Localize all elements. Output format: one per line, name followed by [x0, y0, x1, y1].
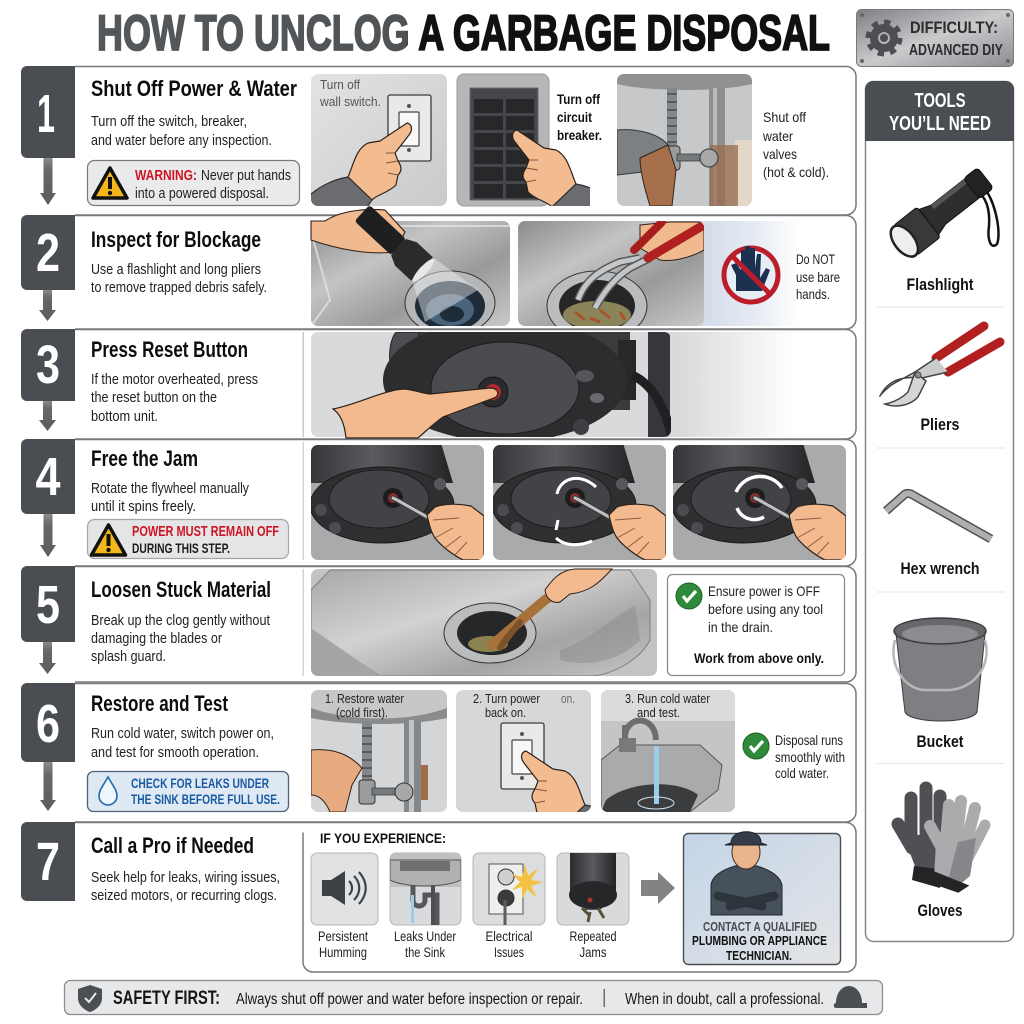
step 7 text — [91, 869, 280, 904]
step 1 heading: Shut Off Power & Water — [91, 76, 297, 101]
label: water valves: Shut off — [763, 109, 806, 125]
icon: no bare hands — [724, 246, 778, 302]
tool: hex wrench: Hex wrench — [900, 559, 980, 578]
step 5 number badge — [21, 566, 75, 642]
step 4 warning callout: POWER MUST REMAIN OFF — [132, 523, 279, 540]
label: do not use bare hands — [796, 251, 840, 302]
image: turn power back on: on. — [561, 691, 575, 706]
safety first bar — [64, 980, 882, 1014]
icon: water drop — [99, 777, 117, 805]
tool: gloves: Gloves — [918, 901, 962, 920]
step 2 text: to remove trapped debris safely. — [91, 279, 267, 296]
step 7 panel — [21, 822, 856, 972]
step 4 text: until it spins freely. — [91, 498, 196, 515]
step 3 text: If the motor overheated, press — [91, 371, 258, 388]
step 1 text — [91, 113, 272, 149]
step 6 number badge: 6 — [36, 694, 60, 754]
step 4 number badge: 4 — [36, 447, 60, 507]
step 7 text: Seek help for leaks, wiring issues, — [91, 869, 280, 886]
step 2 panel — [21, 206, 857, 330]
arrow 6 to 7 — [40, 762, 56, 811]
image: wrench in flywheel — [311, 445, 484, 560]
step 3 number badge — [21, 329, 75, 401]
callout: ensure power off: Ensure power is OFF — [708, 583, 820, 599]
tool: hex wrench — [886, 493, 991, 578]
tool: bucket — [893, 618, 987, 751]
image: spoon in sink drain — [311, 569, 657, 676]
step 1 number badge: 1 — [37, 84, 55, 144]
step 1 number badge — [21, 66, 75, 158]
step 3 text: bottom unit. — [91, 408, 158, 425]
image: rotate wrench with arrows — [493, 445, 666, 560]
step 6 text: Run cold water, switch power on, — [91, 725, 274, 742]
step 2 number badge — [21, 215, 75, 290]
safety first bar: When in doubt, call a professional. — [625, 991, 824, 1008]
tile: electrical issues — [473, 853, 545, 960]
image: turn power back on — [456, 690, 591, 812]
safety first bar: SAFETY FIRST: — [113, 988, 220, 1009]
tile: repeated jams: Jams — [580, 944, 606, 960]
tool: pliers — [880, 326, 1000, 434]
label: do not use bare hands: use bare — [796, 269, 840, 285]
step 3 number badge: 3 — [36, 335, 60, 395]
step 1 panel — [21, 66, 856, 224]
tile: leaks under the sink: Leaks Under — [394, 928, 456, 944]
tool: flashlight: Flashlight — [906, 275, 974, 294]
image: wall switch — [308, 74, 447, 217]
step 1 warning callout: into a powered disposal. — [135, 185, 269, 202]
step 1 warning callout — [88, 160, 300, 206]
image: wall switch: wall switch. — [319, 94, 381, 109]
heading: if you experience: IF YOU EXPERIENCE: — [320, 830, 446, 846]
icon: shield — [78, 985, 102, 1012]
step 4 panel — [21, 439, 856, 566]
icon: hard hat — [834, 986, 867, 1008]
step 6 number badge — [21, 683, 75, 762]
image: circuit breaker — [456, 74, 590, 206]
tile: persistent humming: Persistent — [318, 928, 368, 944]
step 4 warning callout: DURING THIS STEP. — [132, 540, 230, 556]
step 5 number badge: 5 — [36, 575, 60, 635]
arrow 5 to 6 — [39, 642, 56, 674]
tool: bucket: Bucket — [916, 732, 964, 751]
step 2 heading: Inspect for Blockage — [91, 227, 261, 252]
step 4 text — [91, 480, 249, 515]
step 2 text — [91, 261, 267, 296]
callout: check for leaks: THE SINK BEFORE FULL USE. — [131, 791, 280, 807]
image: water valves — [617, 74, 752, 206]
technician card — [684, 832, 840, 964]
callout: ensure power off: before using any tool — [708, 601, 823, 617]
step 3 panel — [21, 329, 857, 440]
callout: ensure power off — [668, 574, 844, 676]
tile: leaks under the sink: the Sink — [405, 944, 446, 960]
image: flashlight over drain — [311, 201, 510, 335]
tools panel — [865, 81, 1014, 942]
step 1 warning callout: Never put hands — [201, 167, 291, 184]
arrow to technician — [641, 872, 675, 904]
label: water valves: water — [762, 128, 793, 144]
step 6 panel — [21, 682, 857, 822]
tile: repeated jams: Repeated — [570, 928, 616, 944]
step 5 text: Break up the clog gently without — [91, 612, 271, 629]
tile: persistent humming: Humming — [319, 944, 367, 960]
image: restore water: 1. Restore water — [325, 691, 405, 706]
label: water valves — [762, 109, 829, 180]
tool: gloves — [898, 788, 985, 920]
image: reset button — [311, 332, 770, 439]
step 4 warning callout — [88, 520, 288, 558]
callout: ensure power off: Work from above only. — [694, 650, 824, 666]
image: run cold water: 3. Run cold water — [625, 691, 711, 706]
label: water valves: (hot & cold). — [763, 164, 829, 180]
note: runs smoothly: Disposal runs — [775, 732, 843, 748]
safety first bar: Always shut off power and water before inspection or repair. — [236, 991, 583, 1008]
note: runs smoothly — [743, 732, 845, 781]
step 5 panel — [21, 566, 856, 682]
step 5 heading: Loosen Stuck Material — [91, 577, 271, 602]
tools heading — [865, 81, 1014, 141]
image: rotate wrench, continued — [673, 445, 846, 560]
tile: leaks under the sink — [390, 853, 461, 960]
label: do not use bare hands: Do NOT — [796, 251, 835, 267]
image: run cold water: and test. — [637, 705, 680, 720]
technician card: TECHNICIAN. — [726, 948, 792, 963]
label: water valves: valves — [763, 146, 797, 162]
step 5 text: splash guard. — [91, 648, 166, 665]
step 7 text: seized motors, or recurring clogs. — [91, 887, 277, 904]
step 1 text: and water before any inspection. — [91, 132, 272, 149]
step 7 heading: Call a Pro if Needed — [91, 833, 254, 858]
image: pliers in drain — [518, 221, 786, 326]
callout: ensure power off: in the drain. — [708, 619, 773, 635]
image: turn power back on: back on. — [485, 705, 526, 720]
arrow 4 to 5 — [40, 514, 56, 557]
callout: check for leaks — [88, 772, 288, 812]
tile: electrical issues: Electrical — [486, 928, 532, 944]
note: runs smoothly: cold water. — [775, 765, 829, 781]
step 7 number badge — [21, 822, 75, 901]
step 4 heading: Free the Jam — [91, 446, 198, 471]
step 1 text: Turn off the switch, breaker, — [91, 113, 247, 130]
step 4 number badge — [21, 439, 75, 514]
arrow 2 to 3 — [39, 290, 56, 321]
step 7 number badge: 7 — [36, 832, 60, 892]
step 5 text — [91, 612, 271, 665]
note: runs smoothly: smoothly with — [775, 749, 845, 765]
step 3 text — [91, 371, 258, 425]
arrow 3 to 4 — [39, 401, 56, 431]
tool: pliers: Pliers — [920, 415, 960, 434]
difficulty badge: DIFFICULTY: — [910, 18, 998, 37]
tile: repeated jams — [557, 853, 629, 960]
step 1 warning callout: WARNING: — [135, 167, 197, 184]
step 2 number badge: 2 — [36, 223, 60, 283]
image: restore water — [311, 690, 447, 812]
step 6 text — [91, 725, 274, 761]
label: circuit breaker: breaker. — [557, 127, 602, 143]
image: wall switch: Turn off — [320, 77, 360, 92]
step 6 heading: Restore and Test — [91, 691, 229, 716]
label: circuit breaker — [557, 91, 602, 143]
image: restore water: (cold first). — [336, 705, 388, 720]
label: circuit breaker: Turn off — [557, 91, 600, 107]
image: turn power back on: 2. Turn power — [473, 691, 541, 706]
step 3 text: the reset button on the — [91, 389, 217, 406]
step 3 heading: Press Reset Button — [91, 337, 248, 362]
callout: check for leaks: CHECK FOR LEAKS UNDER — [131, 775, 269, 791]
step 5 text: damaging the blades or — [91, 630, 222, 647]
step 4 text: Rotate the flywheel manually — [91, 480, 249, 497]
tool: flashlight — [885, 163, 999, 294]
step 2 text: Use a flashlight and long pliers — [91, 261, 261, 278]
tools heading: TOOLS — [914, 90, 966, 112]
tile: persistent humming — [311, 853, 378, 960]
label: do not use bare hands: hands. — [796, 286, 830, 302]
technician card: PLUMBING OR APPLIANCE — [692, 933, 827, 948]
tools heading: YOU’LL NEED — [889, 113, 991, 135]
arrow 1 to 2 — [40, 158, 56, 205]
tile: electrical issues: Issues — [494, 944, 524, 960]
image: run cold water — [601, 690, 735, 812]
step 6 text: and test for smooth operation. — [91, 744, 259, 761]
difficulty badge — [856, 10, 1014, 66]
technician card: CONTACT A QUALIFIED — [703, 919, 817, 934]
label: circuit breaker: circuit — [557, 109, 592, 125]
